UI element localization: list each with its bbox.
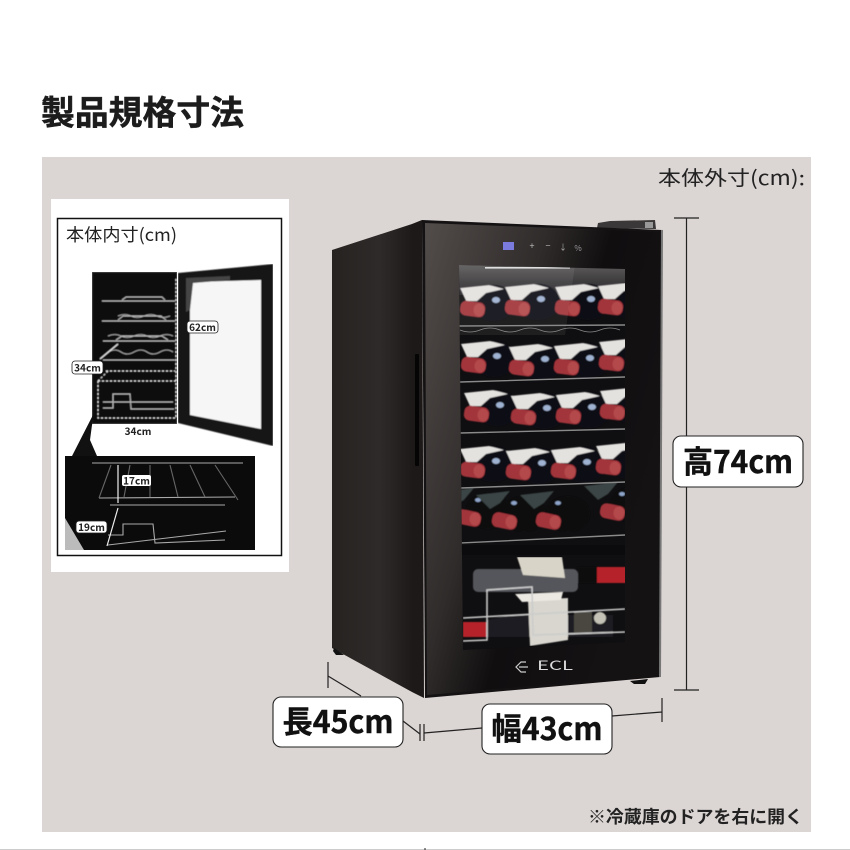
lower compartment bottles (463, 557, 627, 646)
arrow: height dimension (674, 218, 699, 690)
control panel: ↓ (559, 242, 567, 253)
fridge feet (333, 648, 648, 684)
door handle (415, 354, 419, 466)
label: 17cm: 17cm (123, 472, 150, 488)
title: 製品規格寸法 (41, 86, 244, 134)
label: 62cm: 62cm (189, 319, 216, 334)
brand logo (516, 655, 573, 674)
arrow: width dimension (420, 698, 662, 741)
label: 34cm depth: 34cm (74, 360, 101, 374)
fridge side panel (332, 224, 412, 692)
inset fridge door (178, 264, 273, 446)
arrow: depth dimension (328, 662, 420, 734)
bottle rows (460, 283, 625, 530)
label: 19cm: 19cm (78, 519, 105, 534)
panel: interior dimensions inset (51, 199, 289, 572)
heading: external dimensions: 本体外寸(cm): (658, 162, 805, 191)
inset shelf photo (65, 456, 255, 550)
brand logo: ECL (537, 655, 573, 674)
inset fridge body (92, 272, 177, 424)
label: length 45cm: 長45cm (282, 697, 394, 742)
fridge top hinge (597, 220, 656, 229)
control panel: − (546, 239, 550, 252)
label: height 74cm: 高74cm (683, 437, 793, 482)
panel: background (42, 157, 811, 832)
control panel (503, 239, 582, 254)
wine fridge (332, 220, 662, 698)
control panel: % (574, 243, 582, 254)
control panel: + (530, 239, 534, 252)
heading: interior dimensions: 本体内寸(cm) (66, 222, 177, 247)
inset callout wedge (72, 411, 97, 456)
door frame edge (412, 220, 424, 698)
door panel (422, 220, 662, 698)
label: 34cm width: 34cm (125, 423, 151, 438)
label: width 43cm: 幅43cm (492, 704, 602, 749)
note: door opens to the right: ※冷蔵庫のドアを右に開く (588, 804, 803, 829)
glass window with bottles (459, 265, 625, 650)
